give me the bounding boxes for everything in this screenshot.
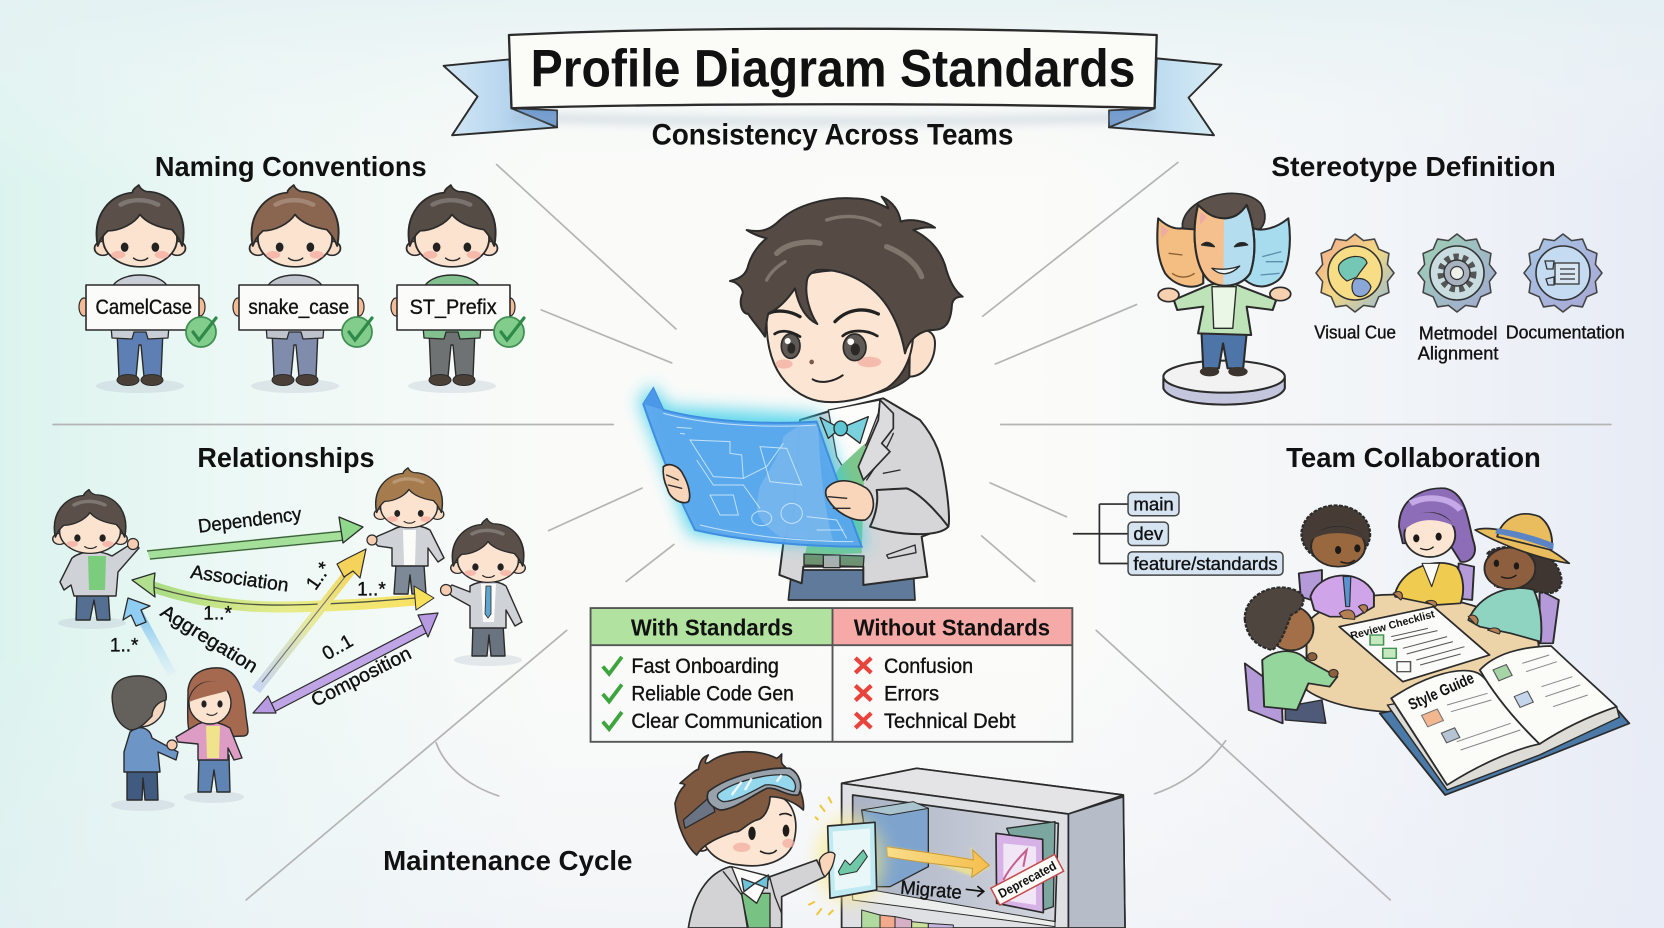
arrow: diagonal to top <box>256 549 366 690</box>
face <box>767 270 913 402</box>
benefits list <box>603 655 822 733</box>
relationship labels: Association <box>189 562 290 597</box>
hair <box>730 197 963 353</box>
masked figure on pedestal <box>1157 193 1291 405</box>
panel: naming conventions <box>79 151 524 393</box>
maintenance illustration <box>675 752 1125 928</box>
benefits list: Fast Onboarding <box>631 655 779 678</box>
table heading: without standards: Without Standards <box>854 615 1050 641</box>
relationship labels: 1..* <box>357 579 386 600</box>
legs <box>1202 333 1247 368</box>
body <box>688 860 825 928</box>
figure: CamelCase <box>79 185 216 393</box>
benefits list: Reliable Code Gen <box>631 682 794 705</box>
figure: person top left <box>53 490 139 629</box>
subtitle: Consistency Across Teams <box>652 118 1013 151</box>
style guide open book <box>1380 646 1629 795</box>
benefits list: Clear Communication <box>631 710 822 733</box>
title banner <box>444 29 1221 151</box>
blueprint sheet <box>643 388 862 547</box>
trousers <box>788 570 915 600</box>
person 4 <box>1245 587 1338 723</box>
mask blue <box>1245 218 1290 286</box>
figure: CamelCase: CamelCase <box>96 296 192 319</box>
relationship labels: 1..* <box>110 636 139 657</box>
hand glow <box>817 817 883 903</box>
figure: snake_case <box>233 185 372 393</box>
heading: maintenance cycle: Maintenance Cycle <box>383 845 632 876</box>
person 1 <box>1302 505 1374 617</box>
sparkles <box>808 797 833 915</box>
panel: team collaboration <box>1073 442 1629 795</box>
comparison table <box>591 608 1072 742</box>
migrate arrow glow <box>887 847 990 877</box>
radiating connector lines <box>53 162 1611 900</box>
migrate arrow <box>887 847 989 877</box>
book and sheet labels: Style Guide <box>1406 670 1477 714</box>
figure: person shaking hands <box>111 676 178 811</box>
arrow: association <box>132 573 434 610</box>
hand right <box>826 481 873 520</box>
book and sheet labels: Review Checklist <box>1349 608 1436 642</box>
arrow: composition purple <box>253 613 438 713</box>
arrow: aggregation blue <box>123 598 172 674</box>
git branch tree: main <box>1133 494 1174 514</box>
drawbacks list <box>855 655 1016 733</box>
migrate label: Migrate <box>899 878 963 904</box>
hand <box>819 852 835 877</box>
card <box>828 822 877 898</box>
relationship labels: 0..1 <box>319 631 357 665</box>
team meeting illustration <box>1245 488 1629 795</box>
relationship labels <box>110 504 415 712</box>
title: Profile Diagram Standards <box>531 39 1135 98</box>
review checklist sheet <box>1339 607 1489 682</box>
maintenance labels <box>899 854 1064 905</box>
panel: maintenance cycle <box>383 752 1125 928</box>
mask orange <box>1157 218 1203 287</box>
figure: ST_Prefix <box>391 185 524 393</box>
hair <box>1182 193 1265 230</box>
drawbacks list: Errors <box>884 682 939 705</box>
book and sheet labels <box>1349 608 1477 714</box>
facial features <box>768 310 881 382</box>
chairs <box>1299 570 1322 603</box>
hands on table <box>1339 592 1500 634</box>
person 3 <box>1468 514 1569 642</box>
banner ribbon tail right <box>1109 58 1221 135</box>
head <box>692 832 711 851</box>
blueprint glow <box>638 385 867 548</box>
figure: person right <box>440 519 525 666</box>
deprecated tag: Deprecated <box>995 858 1059 901</box>
figure: person with long hair <box>167 668 248 803</box>
person 2 <box>1395 488 1475 605</box>
drawbacks list: Confusion <box>884 655 973 678</box>
hair <box>675 752 804 855</box>
blueprint lines <box>663 413 853 542</box>
table heading: with standards: With Standards <box>631 615 793 641</box>
table frame <box>591 608 1072 742</box>
goggles <box>707 768 801 810</box>
hair highlights <box>767 216 922 280</box>
banner panel <box>509 29 1157 108</box>
head nape hair <box>877 347 917 393</box>
table <box>1307 595 1539 712</box>
heading: naming conventions: Naming Conventions <box>155 151 427 182</box>
git branch tree: feature/standards <box>1133 554 1278 574</box>
see-through jacket in blueprint <box>757 425 833 542</box>
relationship labels: 1..* <box>302 558 336 594</box>
badge labels: Documentation <box>1506 323 1625 343</box>
sleeve <box>870 488 948 534</box>
badge: documentation <box>1524 234 1602 312</box>
heading: stereotype definition: Stereotype Definition <box>1271 151 1556 182</box>
heading: relationships: Relationships <box>197 442 375 473</box>
belt <box>804 554 864 567</box>
bookshelf <box>842 768 1125 928</box>
ear <box>909 330 935 377</box>
badge: metamodel alignment <box>1418 234 1496 312</box>
shirt and vest <box>828 400 880 473</box>
figure: ST_Prefix: ST_Prefix <box>410 296 497 319</box>
hand left <box>663 465 690 503</box>
git branch tree: dev <box>1133 524 1163 544</box>
relationship labels: Composition <box>308 643 415 712</box>
pedestal <box>1163 378 1285 405</box>
relationship labels: Aggregation <box>156 601 261 678</box>
with standards header <box>591 608 833 645</box>
bow tie <box>820 417 868 443</box>
badge labels <box>1314 323 1625 364</box>
git branch tree <box>1073 492 1283 575</box>
mask main <box>1195 205 1254 286</box>
badge: visual cue <box>1316 234 1394 312</box>
badge labels: Metmodel <box>1419 324 1497 344</box>
body <box>1174 283 1276 335</box>
badge labels: Alignment <box>1418 344 1498 364</box>
drawbacks list: Technical Debt <box>884 710 1016 733</box>
deprecated books <box>996 822 1055 913</box>
banner ribbon tail left <box>444 59 557 135</box>
figure: person top middle <box>367 468 444 594</box>
central character with blueprint <box>638 197 963 600</box>
figure: snake_case: snake_case <box>248 296 349 319</box>
arrow: dependency green <box>147 517 363 560</box>
blazer <box>779 398 949 585</box>
heading: team collaboration: Team Collaboration <box>1286 442 1541 473</box>
badge labels: Visual Cue <box>1314 323 1396 343</box>
migrate small arrow <box>966 886 984 897</box>
panel: stereotype definition <box>1157 151 1625 405</box>
relationship labels: Dependency <box>197 504 303 538</box>
panel: relationships <box>53 442 525 811</box>
without standards header <box>833 608 1072 645</box>
relationship labels: 1..* <box>203 604 232 625</box>
